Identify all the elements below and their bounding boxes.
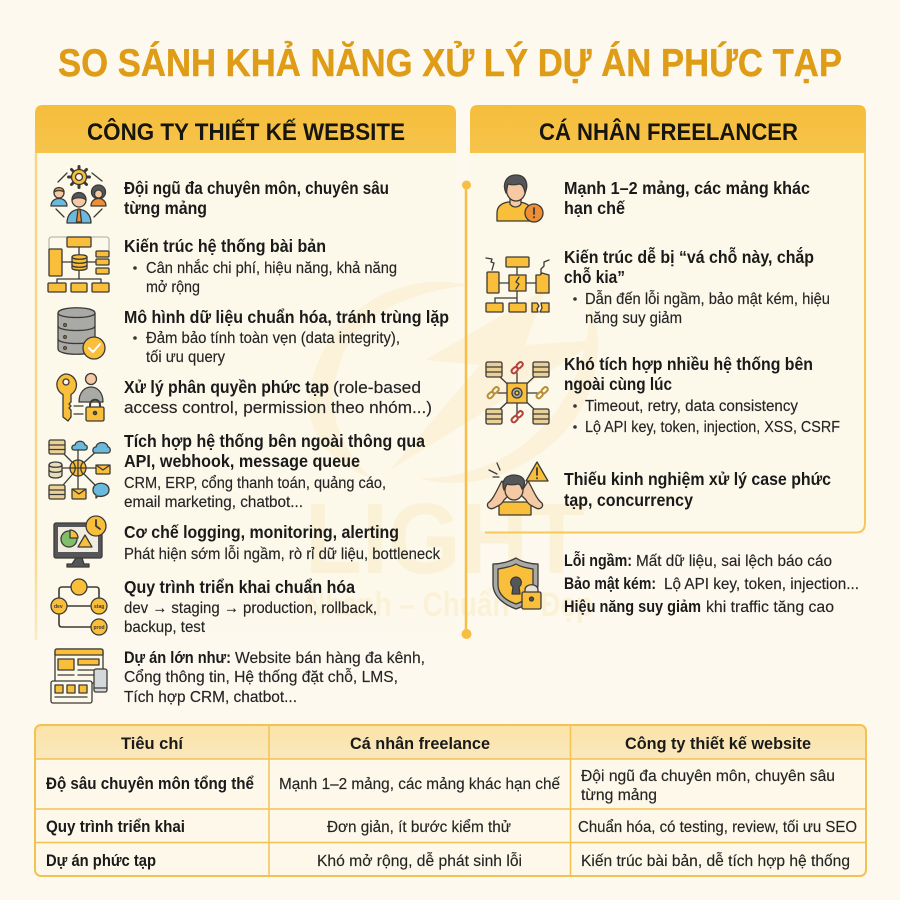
- right panel background: [470, 153, 866, 532]
- text: tích hợp: API, webhook, message queue: [124, 451, 360, 471]
- text: tích hợp: [124, 431, 425, 511]
- text: dự án lớn: Cổng thông tin, Hệ thống đặt chỗ, LMS,: [124, 667, 398, 686]
- text: dự án lớn: Tích hợp CRM, chatbot...: [124, 689, 297, 706]
- text: mô hình dữ liệu: tối ưu query: [146, 349, 225, 366]
- text: consequences: [564, 551, 859, 616]
- text: khó tích hợp: Timeout, retry, data consistency: [585, 398, 798, 415]
- text: logging: [124, 522, 441, 563]
- text: mô hình dữ liệu: Đảm bảo tính toàn vẹn (data integrity),: [146, 330, 400, 347]
- text: mạnh 1-2 mảng: Mạnh 1–2 mảng, các mảng khác: [564, 178, 810, 198]
- table row: quy trình triển khai: Quy trình triển khai: [46, 818, 185, 836]
- text: đội ngũ: từng mảng: [124, 198, 207, 218]
- icon: database check: [58, 308, 105, 359]
- text: consequences: Lỗi ngầm:: [564, 551, 632, 570]
- icon: integration links: [486, 361, 549, 424]
- table row: độ sâu chuyên môn: Độ sâu chuyên môn tổng thể: [46, 775, 254, 793]
- icon: deployment flow: [51, 579, 107, 635]
- text: quy trình: dev → staging → production, rollback,: [124, 600, 377, 617]
- text: dự án lớn: Dự án lớn như:: [124, 649, 231, 667]
- text: tích hợp: Tích hợp hệ thống bên ngoài thông qua: [124, 431, 425, 451]
- text: kiến trúc: Cân nhắc chi phí, hiệu năng, khả năng: [146, 258, 397, 277]
- icon: deployment flow: prod: [94, 625, 105, 631]
- panel: công ty thiết kế website: [35, 105, 456, 706]
- table row: độ sâu chuyên môn: [46, 768, 835, 804]
- icon: shield lock: [493, 558, 541, 609]
- text: quy trình: backup, test: [124, 619, 206, 636]
- text: mạnh 1-2 mảng: [564, 178, 810, 218]
- table row: dự án phức tạp: Kiến trúc bài bản, dễ tích hợp hệ thống: [581, 851, 850, 870]
- table header row: Công ty thiết kế website: [625, 735, 811, 753]
- watermark logo: LIGHT: [305, 483, 585, 595]
- text: kiến trúc: [124, 236, 397, 296]
- table header row: Cá nhân freelance: [350, 735, 490, 753]
- text: kiến trúc: Kiến trúc hệ thống bài bản: [124, 236, 326, 256]
- text: vá chỗ này: năng suy giảm: [585, 310, 682, 327]
- panel header: freelancer: [470, 105, 866, 153]
- text: đội ngũ: [124, 178, 389, 218]
- text: khó tích hợp: Lộ API key, token, injection, XSS, CSRF: [585, 419, 840, 436]
- text: tích hợp: CRM, ERP, cổng thanh toán, quảng cáo,: [124, 474, 386, 492]
- icon: broken architecture: [486, 257, 549, 312]
- text: khó tích hợp: ngoài cùng lúc: [564, 374, 672, 394]
- icon: monitor and clock: [54, 516, 106, 567]
- text: phân quyền: Xử lý phân quyền phức tạp: [124, 377, 329, 397]
- text: thiếu kinh nghiệm: [564, 469, 831, 510]
- watermark logo: Nhanh – Chuẩn – Đẹp: [305, 586, 593, 624]
- text: khó tích hợp: Khó tích hợp nhiều hệ thống bên: [564, 354, 813, 374]
- text: mô hình dữ liệu: [124, 307, 449, 366]
- icon: key and lock: [57, 374, 104, 421]
- text: dự án lớn: [124, 649, 425, 706]
- table row: quy trình triển khai: Đơn giản, ít bước kiểm thử: [327, 818, 511, 836]
- text: quy trình: [124, 577, 377, 636]
- text: quy trình: Quy trình triển khai chuẩn hóa: [124, 577, 355, 597]
- table row: dự án phức tạp: Dự án phức tạp: [46, 852, 156, 870]
- icon: architecture: [48, 237, 109, 292]
- table row: độ sâu chuyên môn: Đội ngũ đa chuyên môn, chuyên sâu: [581, 768, 835, 785]
- text: dự án lớn: Website bán hàng đa kênh,: [235, 650, 425, 667]
- text: phân quyền: access control, permission theo nhóm...): [124, 398, 432, 417]
- panel header: công ty: [35, 105, 456, 153]
- comparison table: [35, 725, 866, 876]
- left panel background: [35, 153, 456, 660]
- icon: integration hub: [49, 440, 110, 499]
- text: phân quyền: (role-based: [333, 378, 421, 397]
- timeline divider: [462, 180, 472, 639]
- panel: cá nhân freelancer: [470, 105, 866, 616]
- table header row: Tiêu chí: [121, 735, 184, 753]
- text: consequences: Mất dữ liệu, sai lệch báo cáo: [636, 553, 832, 570]
- text: consequences: Lộ API key, token, injection...: [664, 576, 859, 593]
- watermark logo: [305, 282, 600, 624]
- icon: deployment flow: dev: [54, 604, 63, 610]
- text: vá chỗ này: [564, 246, 830, 327]
- icon: stressed person: [487, 462, 548, 515]
- table row: độ sâu chuyên môn: Mạnh 1–2 mảng, các mảng khác hạn chế: [279, 776, 560, 793]
- table header row: [121, 735, 811, 753]
- text: tích hợp: email marketing, chatbot...: [124, 494, 303, 511]
- text: kiến trúc: mở rộng: [146, 279, 200, 296]
- table row: quy trình triển khai: [46, 818, 857, 836]
- icon: web layouts: [51, 649, 107, 703]
- table row: độ sâu chuyên môn: từng mảng: [581, 787, 657, 804]
- table row: dự án phức tạp: Khó mở rộng, dễ phát sinh lỗi: [317, 851, 522, 870]
- table row: dự án phức tạp: [46, 851, 850, 870]
- text: consequences: Hiệu năng suy giảm: [564, 598, 701, 616]
- icon: team: [51, 166, 106, 223]
- text: vá chỗ này: chỗ kia”: [564, 266, 625, 287]
- text: consequences: Bảo mật kém:: [564, 575, 656, 593]
- icon: deployment flow: stag: [94, 604, 104, 610]
- text: khó tích hợp: [564, 354, 840, 436]
- text: vá chỗ này: Kiến trúc dễ bị “vá chỗ này, chắp: [564, 246, 814, 267]
- panel header: freelancer: CÁ NHÂN FREELANCER: [539, 118, 798, 146]
- text: mô hình dữ liệu: Mô hình dữ liệu chuẩn hóa, tránh trùng lặp: [124, 307, 449, 327]
- text: đội ngũ: Đội ngũ đa chuyên môn, chuyên sâu: [124, 178, 389, 198]
- text: logging: Phát hiện sớm lỗi ngầm, rò rỉ dữ liệu, bottleneck: [124, 544, 441, 563]
- text: logging: Cơ chế logging, monitoring, alerting: [124, 522, 399, 542]
- text: mạnh 1-2 mảng: hạn chế: [564, 198, 625, 218]
- table row: quy trình triển khai: Chuẩn hóa, có testing, review, tối ưu SEO: [578, 818, 857, 836]
- text: consequences: khi traffic tăng cao: [706, 599, 834, 616]
- panel header: công ty: CÔNG TY THIẾT KẾ WEBSITE: [87, 118, 405, 146]
- text: thiếu kinh nghiệm: tạp, concurrency: [564, 490, 693, 510]
- text: thiếu kinh nghiệm: Thiếu kinh nghiệm xử lý case phức: [564, 469, 831, 489]
- text: phân quyền: [124, 377, 432, 417]
- icon: freelancer alert: [497, 175, 543, 222]
- text: vá chỗ này: Dẫn đến lỗi ngầm, bảo mật kém, hiệu: [585, 289, 830, 308]
